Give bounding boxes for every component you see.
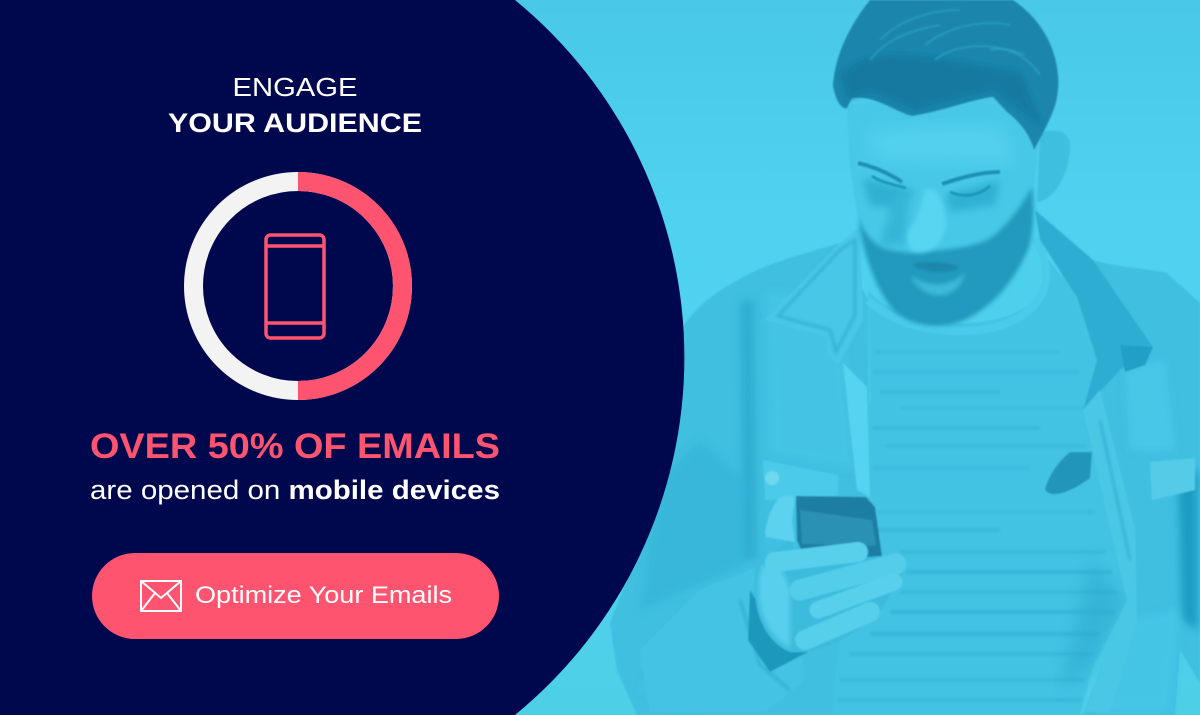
eye shadows bbox=[862, 178, 1000, 245]
chest logo bbox=[1045, 452, 1092, 494]
beard bbox=[858, 187, 1033, 326]
jacket shading bbox=[650, 300, 1200, 630]
chin patch bbox=[910, 272, 965, 295]
heading line 2: YOUR AUDIENCE bbox=[168, 108, 422, 138]
icon: smartphone bbox=[266, 235, 324, 338]
mouth bbox=[912, 262, 960, 272]
heading line 1: ENGAGE bbox=[232, 72, 358, 102]
man photo illustration bbox=[610, 0, 1200, 715]
hand bbox=[755, 496, 905, 652]
jacket pocket bbox=[763, 460, 838, 500]
left collar bbox=[788, 230, 862, 356]
icon: envelope bbox=[141, 581, 181, 611]
right collar bbox=[1035, 210, 1153, 410]
hair highlights bbox=[870, 10, 1040, 75]
phone bbox=[796, 496, 882, 558]
button label: Optimize Your Emails bbox=[195, 582, 452, 609]
t-shirt collar bbox=[868, 238, 1046, 331]
ear bbox=[1037, 131, 1070, 202]
navy circle panel bbox=[0, 0, 684, 715]
jacket body right bbox=[1062, 260, 1200, 715]
left placket bbox=[843, 363, 870, 497]
right eye bbox=[950, 186, 990, 195]
placket stitching bbox=[1100, 420, 1130, 560]
left eye bbox=[872, 176, 906, 188]
button bbox=[92, 553, 499, 639]
collar underside bbox=[1120, 345, 1153, 372]
palm edge bbox=[759, 565, 790, 648]
statistic headline: OVER 50% OF EMAILS bbox=[90, 427, 500, 466]
left eyebrow bbox=[858, 163, 902, 182]
cuff seam bbox=[740, 600, 790, 690]
right side shadow on shirt bbox=[1068, 573, 1122, 678]
donut chart 50% bbox=[194, 182, 402, 390]
t-shirt bbox=[833, 237, 1127, 715]
right eyebrow bbox=[942, 172, 1000, 184]
pocket button bbox=[765, 471, 779, 485]
right placket bbox=[1083, 390, 1137, 712]
face bbox=[852, 170, 1034, 245]
jacket body left bbox=[610, 243, 870, 715]
hair bbox=[833, 0, 1058, 150]
wrist shadow bbox=[748, 590, 808, 672]
fingers bbox=[775, 552, 896, 640]
cuff bbox=[640, 568, 803, 712]
t-shirt stripes bbox=[840, 392, 1110, 701]
nose bbox=[907, 189, 946, 252]
thumb bbox=[765, 496, 795, 542]
forehead highlight bbox=[878, 130, 1003, 158]
right sleeve pocket flap bbox=[1150, 458, 1195, 500]
left collar stitching bbox=[778, 240, 855, 352]
darker hair fringe bbox=[843, 57, 1036, 118]
neck bbox=[869, 242, 1042, 323]
palm bbox=[755, 540, 905, 652]
statistic subtext: are opened on mobile devices bbox=[90, 475, 500, 505]
heading bbox=[168, 72, 422, 138]
